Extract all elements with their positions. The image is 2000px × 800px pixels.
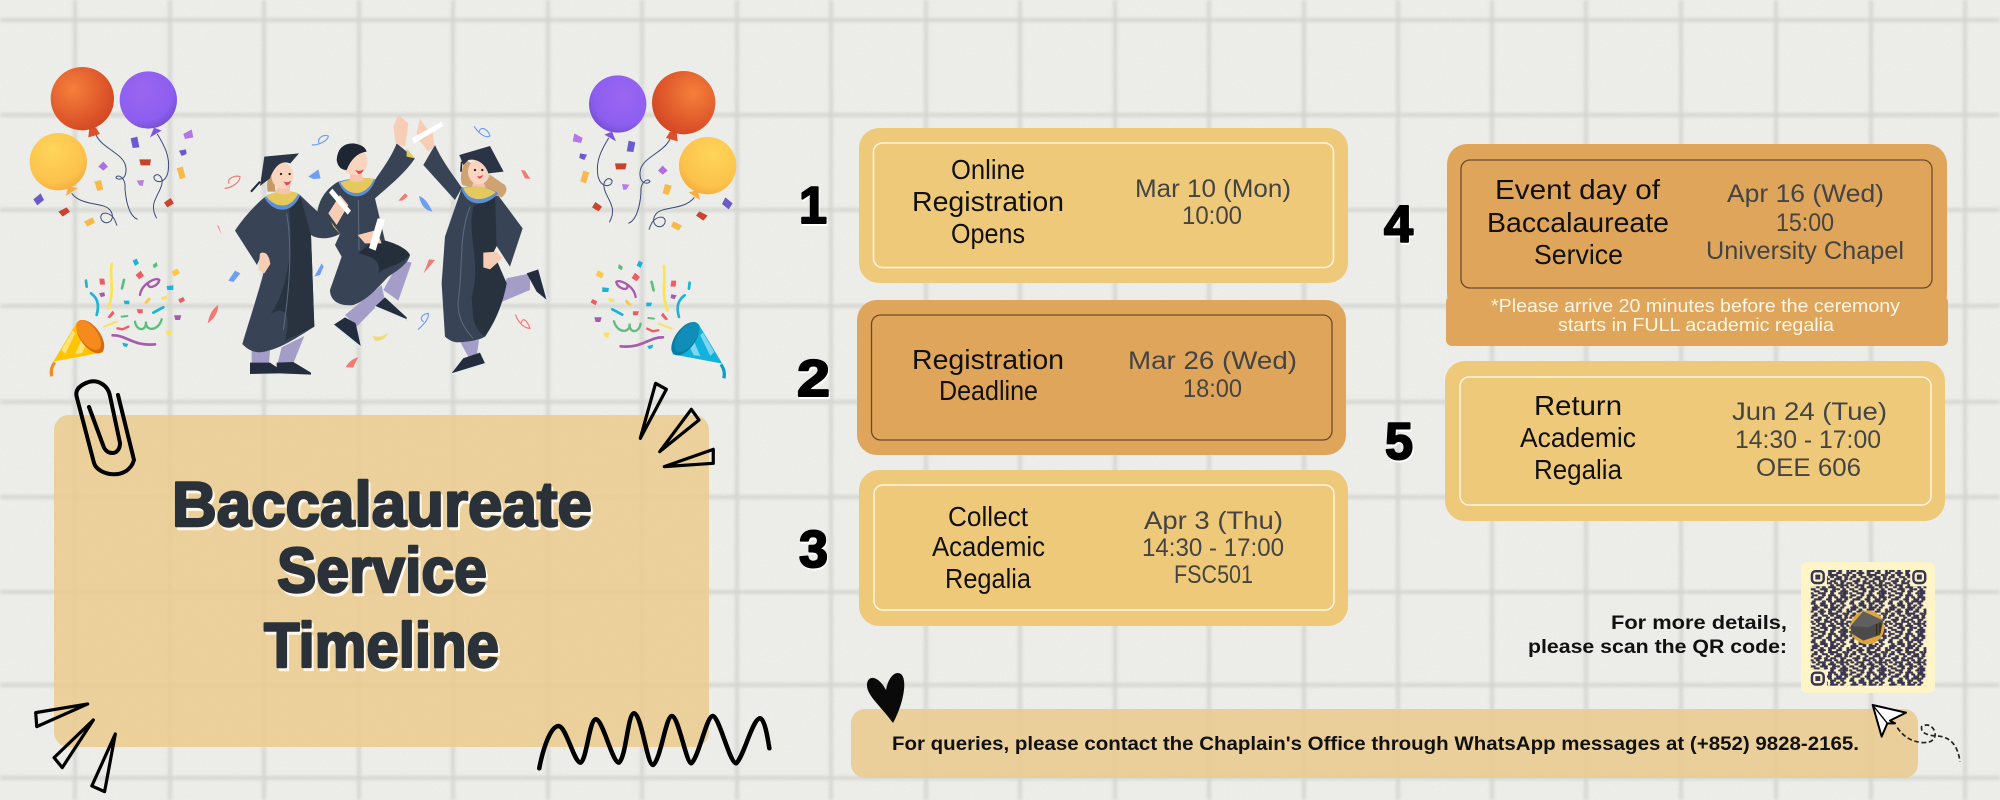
panel: step 4: Apr 16 (Wed) [1727,180,1884,208]
graduate: left [235,153,340,375]
QR instruction text: please scan the QR code: [1528,637,1787,658]
panel: step 1: Opens [951,218,1025,249]
QR instruction text [1528,613,1787,658]
panel: step 3: Collect [948,501,1028,532]
panel: step 4: 15:00 [1776,209,1834,237]
panel: step 3: Apr 3 (Thu) [1144,507,1283,535]
left party popper cone [50,315,110,377]
panel: step 4: Service [1534,239,1623,270]
number 4: 4 [1384,196,1413,254]
heading: Baccalaureate Service Timeline [172,470,592,681]
QR instruction text: For more details, [1611,613,1787,634]
confetti around graduates [208,127,530,368]
panel: step 1: Online [951,154,1025,185]
graduates illustration [208,115,548,375]
panel: step 5: Return [1534,390,1622,421]
icon: heart [867,673,904,723]
heading: Baccalaureate Service Timeline: Timeline [264,611,499,681]
decoration: spikes top right [640,383,713,467]
graduate: right [412,118,548,374]
left party popper confetti [86,259,185,347]
panel: step 4: Baccalaureate [1487,207,1669,238]
icon: paper plane with dashed trail [1873,705,1960,762]
panel: step 1: 10:00 [1182,202,1242,230]
panel: contact bar [851,709,1918,778]
panel: step 5: Regalia [1534,454,1622,485]
number 1: 1 [799,177,827,235]
panel: step 3: FSC501 [1174,561,1253,589]
panel: title card [54,415,709,747]
number 2: 2 [797,350,830,408]
left balloons with strings and confetti [30,67,193,227]
note: arrival reminder: *Please arrive 20 minutes before the ceremony [1491,296,1900,316]
icon: paperclip [76,381,134,474]
panel: step 2: Mar 26 (Wed) [1128,347,1297,375]
panel: step 2: 18:00 [1183,375,1242,403]
panel: step 2 [857,300,1346,455]
panel: contact bar: For queries, please contact the Chaplain's Office through WhatsApp messages at (+852) 9828-2165. [892,734,1859,755]
panel: step 1 [859,128,1348,283]
number 3: 3 [799,521,828,579]
panel: step 5: 14:30 - 17:00 [1735,426,1881,454]
panel: step 5 [1445,361,1945,521]
icon: graduation cap logo [1850,610,1884,644]
number 5: 5 [1385,413,1413,471]
panel: step 4 [1446,144,1948,346]
panel: step 1: Registration [912,186,1064,217]
panel: step 4: Event day of [1495,174,1660,205]
panel: step 3 [859,470,1348,626]
panel: step 2: Registration [912,344,1064,375]
right party popper confetti [591,261,690,349]
right party popper cone [666,317,726,379]
panel: step 5: OEE 606 [1756,454,1861,482]
heading: Baccalaureate Service Timeline: Baccalaureate [172,470,592,540]
panel: step 4: University Chapel [1706,237,1904,265]
note: arrival reminder: starts in FULL academic regalia [1558,315,1835,335]
panel: step 3: Regalia [945,563,1031,594]
QR code [1801,562,1935,693]
panel: step 2: Deadline [939,375,1038,406]
panel: step 3: Academic [932,531,1045,562]
panel: step 5: Academic [1520,422,1636,453]
heading: Baccalaureate Service Timeline: Service [277,536,487,606]
note: arrival reminder [1491,296,1900,335]
panel: step 1: Mar 10 (Mon) [1135,175,1291,203]
panel: step 5: Jun 24 (Tue) [1732,398,1887,426]
decoration: spikes bottom left [36,704,115,792]
right balloons with strings and confetti [573,71,736,231]
decoration: zigzag [539,713,769,768]
panel: step 3: 14:30 - 17:00 [1142,534,1284,562]
graduate: middle [312,115,415,347]
